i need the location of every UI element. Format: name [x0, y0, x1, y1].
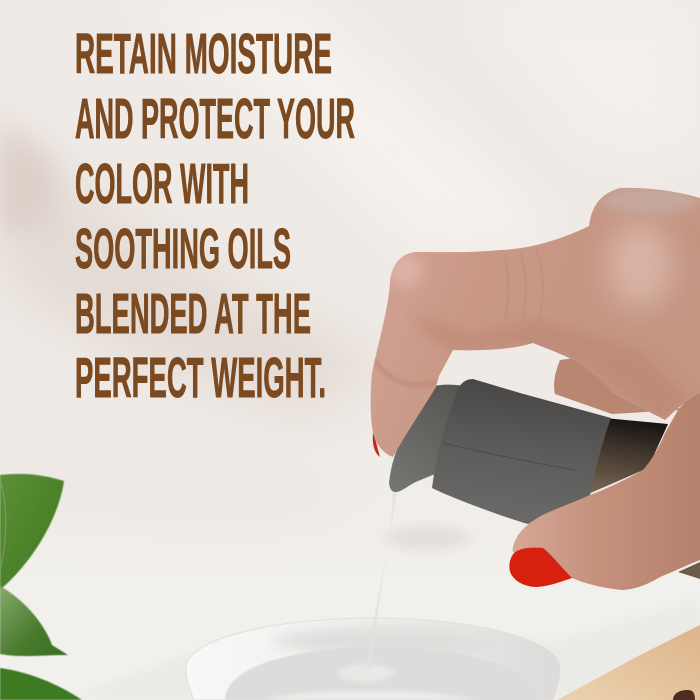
hand: thumb	[513, 393, 700, 590]
bottle seam	[443, 443, 575, 470]
hand: skin shading	[375, 186, 700, 420]
headline text: PERFECT WEIGHT.	[75, 346, 326, 410]
photo scene with headline: AND PROTECT YOUR	[75, 87, 355, 151]
plant leaves	[0, 474, 82, 700]
bottle nozzle	[389, 385, 470, 492]
oil stream	[367, 492, 397, 668]
red nail on thumb	[509, 548, 572, 587]
headline text: BLENDED AT THE	[75, 282, 311, 346]
wooden board	[557, 625, 700, 700]
bottle base peeking under thumb	[678, 562, 700, 579]
headline text: RETAIN MOISTURE	[75, 22, 332, 86]
headline text	[75, 22, 355, 410]
white bowl with oil	[186, 618, 560, 700]
hand: index finger and palm	[371, 186, 700, 457]
red nail on index finger	[373, 433, 380, 457]
bottle body	[432, 379, 611, 524]
pump bottle	[389, 379, 668, 524]
hand: back finger	[554, 350, 680, 414]
headline text: COLOR WITH	[75, 152, 249, 216]
bronze collar	[586, 418, 668, 495]
headline text: SOOTHING OILS	[75, 217, 291, 281]
